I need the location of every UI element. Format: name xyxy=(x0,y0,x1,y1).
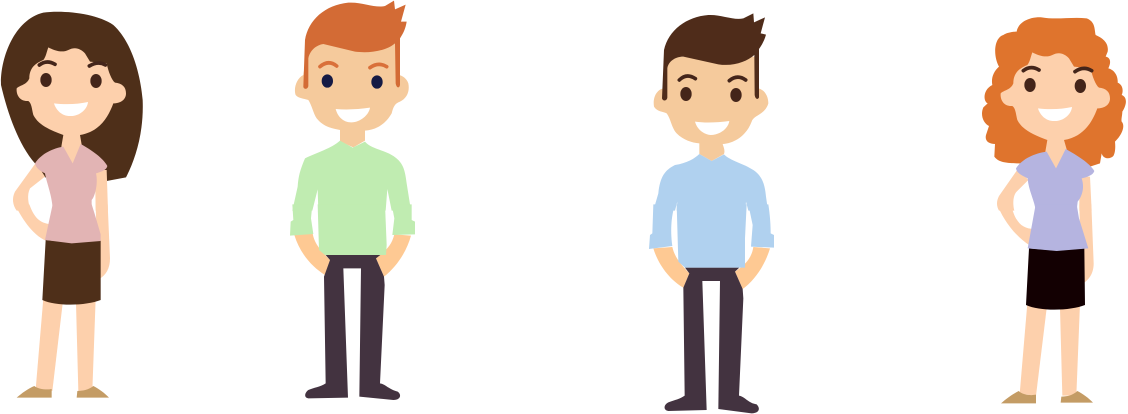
woman 1 smile xyxy=(54,102,88,116)
woman 1 face and neck xyxy=(17,47,126,165)
man 2 eyebrows xyxy=(320,63,387,68)
man 3 arms xyxy=(653,247,770,289)
man 2 shirt xyxy=(290,141,415,255)
man 3 eyes xyxy=(680,87,742,102)
man 2 smile xyxy=(336,108,370,122)
woman 4 face and neck xyxy=(1001,52,1110,170)
woman 1 eyebrows xyxy=(39,62,105,66)
woman 1 skirt xyxy=(42,240,101,305)
figure: man with red hair and green shirt xyxy=(290,1,415,400)
man 2 eyes xyxy=(322,74,383,89)
woman 4 legs xyxy=(1020,303,1080,396)
man 2 arms xyxy=(294,234,411,277)
man 3 eyebrows xyxy=(679,76,746,81)
woman 1 arms xyxy=(13,163,110,279)
man 2 trousers and shoes xyxy=(305,255,400,400)
man 2 face and neck xyxy=(295,43,409,147)
woman 1 shoes xyxy=(17,386,109,398)
woman 4 curly hair xyxy=(982,17,1126,167)
man 3 smile xyxy=(695,121,729,135)
woman 1 eyes xyxy=(40,73,102,88)
man 2 hair xyxy=(303,1,407,89)
woman 1 hair xyxy=(1,12,143,181)
man 3 face and neck xyxy=(654,57,768,161)
woman 4 eyes xyxy=(1024,78,1086,93)
woman 4 top xyxy=(1016,149,1094,251)
woman 1 legs xyxy=(36,298,96,391)
woman 4 eyebrows xyxy=(1023,68,1092,72)
figure: woman with brown hair and pink top xyxy=(1,12,143,398)
man 3 trousers and shoes xyxy=(665,268,759,413)
man 3 hair xyxy=(662,13,766,100)
man 3 shirt xyxy=(649,154,774,268)
woman 4 shoes xyxy=(1001,391,1093,403)
woman 4 skirt xyxy=(1026,248,1085,310)
figure: woman with curly orange hair and lilac top xyxy=(982,17,1126,403)
woman 4 arms xyxy=(997,168,1094,284)
woman 1 top xyxy=(35,144,107,243)
figure: man with brown hair and blue shirt xyxy=(649,13,774,413)
woman 4 smile xyxy=(1038,107,1072,121)
